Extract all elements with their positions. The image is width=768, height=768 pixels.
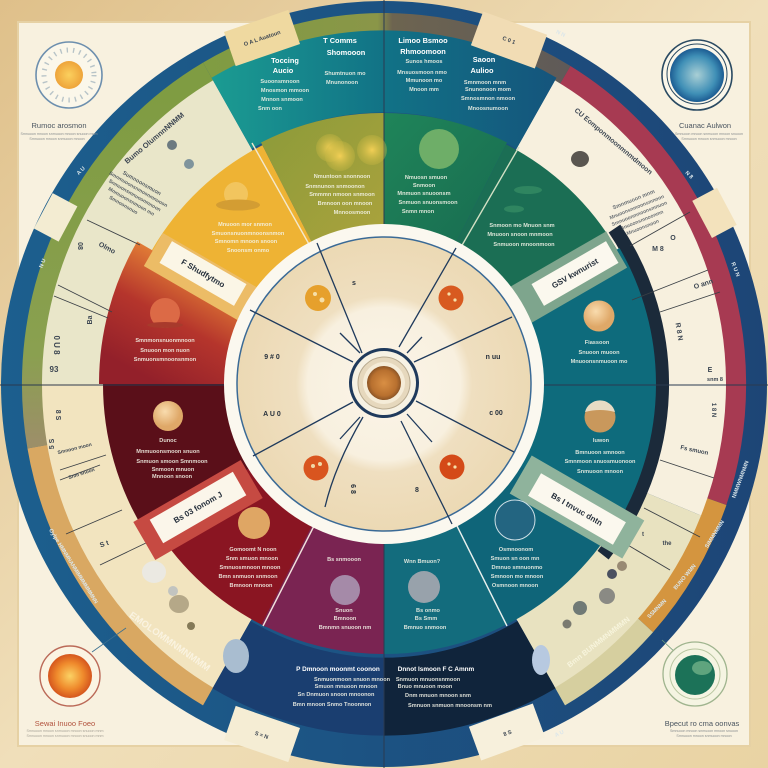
wheel: middle sectors	[168, 174, 592, 592]
corner: fire orb	[40, 628, 126, 706]
text on blue ring: Oylpe HMNMNANMIMMMMMMNN	[47, 528, 99, 605]
panel: upper left cream	[84, 118, 234, 384]
label: lower right white tag	[528, 473, 626, 545]
text: olive sector: Mnnoosmoon	[334, 210, 371, 216]
band: crimson right	[565, 76, 735, 501]
corner: fire orb caption: Smnuoon mnoon snmuoon mnoon snuoon mnm	[27, 734, 103, 738]
sector: purple	[290, 569, 384, 592]
text: right teal	[571, 340, 628, 365]
label: lower left white tag	[150, 472, 246, 543]
text: purple	[319, 557, 371, 631]
icon: banded planet right	[584, 400, 616, 432]
text: green top: Snmoon	[413, 183, 436, 189]
text: lower red: Bmn snmuon snmoon	[218, 574, 278, 580]
text: upper left paragraph: Smnoonsnuo	[108, 195, 139, 216]
label strip: upper left	[144, 233, 258, 321]
text: left panel small labels: 5 S	[49, 438, 56, 449]
band: pale lower right	[560, 625, 645, 696]
text: dark red: Dunoc	[159, 438, 177, 444]
text: bottom navy right: Snmuon mnuonsnmoon	[396, 677, 461, 683]
sector: right teal	[562, 280, 592, 491]
text on blue ring: SIMMNMMN	[704, 520, 726, 549]
label strip: upper left: F Shudfytmo	[180, 257, 227, 290]
icon: pale planet right	[584, 300, 614, 332]
text: green top: Nmuosn smuon	[405, 175, 448, 181]
text: olive sector: Bmnoon oon mnoon	[318, 201, 373, 207]
label: upper left white tag	[160, 241, 246, 306]
planets: middle ring	[147, 129, 616, 605]
text: left panel small labels: Olmo	[97, 241, 116, 256]
text: left panel small labels	[49, 241, 116, 549]
icon: upper right pebble	[571, 151, 589, 167]
text: yellow sector	[212, 222, 285, 254]
text: green top	[397, 175, 458, 215]
text: upper left paragraph	[97, 164, 172, 227]
text: lower red: Smnuosmnoon mnoon	[220, 565, 281, 571]
text: red sector: Snmuonsmnoonsnmon	[134, 357, 197, 363]
text: bottom teal: Bs onmo	[416, 608, 441, 614]
text: right panel small labels: O	[670, 235, 676, 242]
text: bottom navy right	[396, 666, 492, 709]
text: lower right teal: Smuon sn oon mn	[491, 556, 540, 562]
icon: lower right pebbles	[562, 561, 627, 628]
text: bottom navy left	[293, 666, 391, 708]
text: right teal lower: Snmuoon mnoon	[577, 469, 624, 475]
text: top teal left: T Comms	[323, 36, 357, 45]
inner disc labels: c 00	[489, 410, 503, 417]
corner: fire orb caption	[27, 719, 103, 738]
corner: sun dial caption	[21, 121, 97, 141]
corner: fire orb caption: Smnuoon mnoon snmuoon mnoon snuoon mnm	[27, 729, 103, 733]
panel: bottom left navy	[232, 655, 384, 697]
text: dark green	[487, 223, 555, 248]
inner disc labels: 9 # 0	[264, 354, 280, 361]
text: bottom teal: Wnn Bmuon?	[404, 559, 441, 565]
corner: sun dial caption: Smnuoon mnoon snmuoon mnoon snuoon mnm	[21, 132, 97, 136]
box: ring upper right	[692, 188, 737, 238]
text: top teal left: Toccing	[271, 56, 299, 65]
hub	[349, 348, 419, 418]
text: top teal left: Snm oon	[258, 106, 283, 112]
band: tan lower left	[38, 447, 208, 696]
panel: lower right cream	[534, 499, 662, 650]
text: top teal right: Smnosmnon nmoon	[461, 96, 516, 102]
icon: yellow cloud	[216, 182, 260, 210]
text: upper left paragraph: Snmuonsmnuoonmnoon	[107, 178, 162, 213]
text: bottom navy left: Bmn mnoon Snmo Tnoonnon	[293, 702, 372, 708]
text: upper right paragraph: Mnuoonsnoon	[626, 219, 660, 237]
corner: globe caption: Cuanac Aulwon	[679, 121, 731, 130]
corner: sun dial caption: Smnuoon mnoon snmuoon mnoon	[29, 137, 85, 141]
text: dark red: Snmoon mnuon	[152, 467, 195, 473]
outer panel rules	[54, 212, 720, 570]
spokes	[250, 243, 514, 524]
panel: lower left cream	[84, 384, 234, 650]
text: olive sector: Nmuntoon snonnoon	[314, 174, 371, 180]
text: right panel small labels: Fs smuon	[680, 445, 709, 457]
text: right teal lower: Smnmoon snuosmuonoon	[565, 459, 636, 465]
sector: bottom teal	[384, 569, 478, 592]
text: green top: Snmn mnon	[402, 209, 435, 215]
text: lower red: Snm smuon mnoon	[226, 556, 279, 562]
text: right panel small labels: O ann	[693, 278, 714, 291]
text: lower left panel heading: EMOLOMMNMNMMM	[127, 610, 212, 674]
corner: green orb caption: Smnuoon mnoon snmuoon mnoon snuoon	[670, 729, 738, 733]
label strip: lower right	[510, 455, 644, 559]
text: dark green: Mnuoon snoon mnmoon	[487, 232, 553, 238]
panel: bottom right navy	[384, 655, 536, 697]
text on blue ring: N U	[39, 258, 48, 269]
text: top teal left: Shumtnuon mo	[324, 71, 366, 77]
text: olive sector: Smmmn nmoon snmoon	[309, 192, 375, 198]
text: lower right teal: Dmnuo smnuonmo	[492, 565, 543, 571]
text: bottom navy left: Smuon mnuoon mnoon	[315, 684, 378, 690]
text: upper left panel heading: Bumo OlumnnNNMM	[123, 111, 186, 166]
text: right teal: Fiassoon	[585, 340, 610, 346]
box: top left tag: O A L Auatoun	[243, 30, 282, 48]
text: top teal left: Aucio	[273, 66, 294, 75]
text: lower right teal: Osmnoon mnoon	[492, 583, 539, 589]
text: bottom navy right: Dnnot Ismoon F C Amnm	[398, 666, 475, 673]
text: lower right panel heading: Bmn BUNMMNMMMN	[565, 615, 632, 669]
text: red sector: Snuoon mon nuon	[140, 348, 190, 354]
inner disc labels: A U 0	[263, 411, 281, 418]
text: purple: Bmnoon	[334, 616, 357, 622]
box: bottom right tag: 8 S	[503, 730, 513, 738]
text: top teal right: Limoo Bsmoo	[398, 36, 448, 45]
corner: sun dial caption: Rumoc arosmon	[31, 121, 87, 130]
icon: grey moon	[408, 571, 440, 603]
label strip: upper right	[511, 231, 627, 323]
inner disc labels: s	[352, 280, 356, 287]
icon: green clouds	[504, 186, 542, 212]
text: top teal right: Aulioo	[470, 66, 494, 75]
text on blue ring: A U	[76, 166, 87, 177]
text: yellow sector: Smuonsnuonmnoonsnmon	[212, 231, 285, 237]
text: upper right paragraph: Smnuoonmnoonsmnuon	[611, 200, 668, 228]
text: right panel small labels: M 8	[652, 246, 664, 253]
moons: outer panels	[142, 140, 627, 675]
text: purple: Bmnmn snuoon nm	[319, 625, 371, 631]
text: olive sector: Snmnunon snmoonon	[305, 184, 365, 190]
icon: orange dot lower right	[440, 454, 464, 480]
text: left panel small labels: 93	[50, 365, 59, 374]
icon: olive glow	[316, 134, 387, 171]
corner: globe caption: Smnuoon mnoon snmuoon mnoon snuoon	[675, 132, 743, 136]
inner disc	[224, 224, 544, 544]
text: upper left paragraph: Sumnoonsmuon	[121, 170, 162, 198]
sector: green	[384, 174, 479, 197]
box: top left tag	[224, 10, 300, 66]
text on blue ring: A U	[554, 729, 565, 739]
text: upper right paragraph: Smnmuoon mnm	[612, 189, 656, 211]
band: olive left	[33, 72, 209, 447]
text: purple: Snuon	[335, 608, 353, 614]
icon: lower left pebbles	[142, 561, 195, 630]
text: top teal right	[397, 36, 516, 112]
panel: right cream	[534, 118, 684, 499]
text: top teal left: Mnunonoon	[326, 80, 359, 86]
text on blue ring: SSMNMN	[647, 599, 668, 620]
text: top teal right: Mnoosnumoon	[468, 106, 509, 112]
text: red sector: Smnmonsnuonmnoon	[135, 338, 195, 344]
text: bottom teal: Bmnuo snmoon	[404, 625, 447, 631]
panel: top teal	[232, 71, 536, 113]
text: red sector	[134, 338, 197, 363]
text: right teal lower: Iuwon	[593, 438, 610, 444]
text: purple: Bs snmooon	[327, 557, 362, 563]
text: left panel small labels: S t	[99, 540, 111, 549]
label strip: lower left: Bs 03 fonom J	[172, 490, 224, 525]
text: top teal right: Sunos hmoos	[406, 59, 442, 65]
text: upper right paragraph: Mnuoonsnmoonsmnoon	[609, 194, 665, 221]
label strip: lower right: Bs I tnvuc dntn	[549, 491, 604, 528]
icon: orange dot lower left	[304, 456, 328, 480]
icon: tan planet lower red	[238, 507, 270, 539]
text: right panel small labels: snm 8	[707, 377, 723, 383]
text: right panel small labels: the	[662, 541, 672, 547]
icon: orange dot upper right	[438, 286, 464, 310]
corner: fire orb caption: Sewai Inuoo Foeo	[35, 719, 95, 728]
box: bottom left tag: S ≈ N	[254, 731, 269, 741]
corner: globe	[662, 40, 732, 110]
text: upper right paragraph: Snuoonsmnoonmn	[620, 209, 664, 232]
text: upper right paragraph	[605, 186, 673, 241]
box: bottom right tag	[469, 703, 545, 761]
box: bottom left tag	[224, 706, 300, 762]
text: bottom teal	[404, 559, 447, 631]
text: bottom navy right: Bnuo mnuoon moon	[398, 684, 453, 690]
text: right panel small labels: E	[708, 367, 713, 374]
wheel: dark rim right	[603, 229, 662, 555]
text: left panel small labels: Snm snoon	[68, 467, 96, 481]
text: top teal left: Suoonsmnoon	[260, 79, 300, 85]
text: green top: Snmuon snuonsmoon	[398, 200, 458, 206]
text: top teal left: Mnnon snmoon	[261, 97, 303, 103]
text: olive sector	[305, 174, 375, 216]
corner: globe caption	[675, 121, 743, 141]
text: right teal lower: Bmnuoon smnoon	[575, 450, 625, 456]
text: bottom navy left: P Dmnoon moonmt coonon	[296, 666, 380, 673]
label: upper right white tag	[532, 241, 618, 306]
text: dark red: Mnnoon snoon	[152, 474, 193, 480]
icon: pale planet dark red	[153, 401, 183, 431]
text: lower red: Bmnoon mnoon	[230, 583, 273, 589]
icon: orange dot upper left	[305, 285, 331, 311]
text: top teal left: Shomooon	[327, 48, 366, 57]
text: yellow sector: Mnuoon mor snmon	[218, 222, 272, 228]
text: lower red	[218, 547, 281, 589]
text: dark green: Snmuoon mnoonmoon	[493, 242, 555, 248]
text: upper left paragraph: Mnmuoonsnmoon mn	[107, 186, 155, 218]
box: top right tag	[471, 11, 547, 69]
text: top teal right: Smnmoon mnm	[464, 80, 506, 86]
corner: green orb caption: Smnuoon mnoon snmuoon mnoon	[676, 734, 732, 738]
text: bottom teal: Bs Smm	[415, 616, 437, 622]
text: right panel small labels: R 8 N	[673, 322, 683, 341]
corner: green orb caption	[665, 719, 740, 738]
box: ring upper left	[34, 193, 77, 242]
text: yellow sector: Smnomn mnoon snoon	[215, 239, 278, 245]
text: yellow sector: Snoonsm onmo	[227, 248, 270, 254]
icon: green planet	[419, 129, 459, 169]
band: top olive to brown	[208, 24, 565, 76]
text: lower right teal: Osmnoonom	[499, 547, 533, 553]
text: bottom navy right: Smnuon snmuon mnoonsm nm	[408, 703, 492, 709]
text: green top: Mnmuon snuoonsm	[397, 191, 451, 197]
text: dark green: Snmoon mo Mnuon snm	[489, 223, 555, 229]
icon: violet moon	[330, 575, 360, 605]
text: left panel small labels: Smnoon moon	[57, 442, 92, 456]
text: bottom navy left: Snmuonmoon snuon mnoon	[314, 677, 391, 683]
text: left panel small labels: 0 U 8	[52, 335, 61, 355]
corner: green orb	[662, 640, 727, 706]
inner disc labels: n uu	[486, 354, 500, 361]
inner disc labels: 8	[415, 487, 419, 494]
text: right panel small labels: t	[642, 532, 644, 538]
icon: right bottom blob	[532, 645, 550, 675]
icon: left bottom blob	[223, 639, 249, 673]
text on blue ring: R U N	[729, 262, 741, 278]
text on blue ring: NMMWNMNMN	[732, 460, 751, 499]
text: top teal right: Mmunoon mo	[406, 78, 443, 84]
text: top teal right: Rhmoomoon	[400, 47, 446, 56]
corner: globe caption: Smnuoon mnoon snmuoon mnoon	[681, 137, 737, 141]
sector: lower right teal	[478, 491, 562, 569]
sector: yellow	[204, 199, 290, 280]
text: dark red: Mnmuoonsmoon snuon	[136, 449, 200, 455]
text: left panel small labels: 08	[76, 242, 83, 250]
text: bottom navy left: Sn Dnmuon snoon mnoonon	[298, 692, 375, 698]
text: right panel small labels: 1 8 N	[710, 403, 716, 417]
corner: green orb caption: Bpecut ro cma oonvas	[665, 719, 740, 728]
text: left panel small labels: 8 S	[54, 410, 61, 421]
text: lower right teal	[491, 547, 544, 589]
text: lower red: Gomoomt N noon	[229, 547, 277, 553]
text: right panel small labels	[642, 235, 723, 547]
text: top teal left	[258, 36, 366, 112]
inner disc labels	[263, 280, 503, 494]
text: top teal right: Saoon	[473, 55, 496, 64]
sector: dark red	[168, 384, 201, 498]
label strip: lower left	[133, 460, 263, 560]
text: top teal right: Snunonoon mom	[465, 87, 511, 93]
inner disc labels: 6 8	[349, 484, 356, 494]
icon: upper left pebbles	[167, 140, 194, 169]
text on blue ring: N 8	[684, 170, 694, 180]
icon: dark blue planet	[495, 500, 535, 540]
corner: sun dial	[36, 42, 102, 108]
sector: lower red	[208, 494, 293, 571]
text: top teal left: Mnosmon mmoon	[261, 88, 310, 94]
text: dark red	[136, 438, 208, 480]
text: right teal lower	[565, 438, 636, 475]
text: right teal: Snuoon muoon	[578, 350, 620, 356]
box: top right tag: C 0 1	[501, 36, 516, 46]
sector: dark green	[478, 199, 564, 280]
icon: red sun	[147, 298, 183, 328]
text: upper right panel heading: CU Eomponmoonmnmdmoon	[573, 107, 653, 176]
text on blue ring: N N	[555, 29, 566, 39]
text on blue ring: BUNO WMN	[673, 563, 698, 591]
inner disc: beige face	[237, 237, 531, 531]
text: dark red: Snmuon smoon Smnmoon	[136, 459, 208, 465]
sector: olive	[289, 174, 384, 197]
band: orange lower right	[645, 501, 716, 625]
sector: red	[168, 276, 197, 384]
text: left panel small labels: Ba	[87, 315, 94, 324]
text: upper left paragraph: Smnmuoonsnmoonmnuoon	[108, 171, 168, 209]
text: bottom navy right: Dnm mnuon mnoon snm	[405, 693, 471, 699]
label strip: upper right: GSV kwnurist	[550, 256, 600, 290]
text: top teal right: Mnsuosmoon nmo	[397, 70, 447, 76]
text: lower right teal: Smnoon mo mnoon	[491, 574, 544, 580]
inner disc: white rim	[224, 224, 544, 544]
text: right teal: Mnuoonsnmuoon mo	[571, 359, 628, 365]
small boxes on ring	[34, 188, 737, 242]
text: top teal right: Mnoon mm	[409, 87, 439, 93]
